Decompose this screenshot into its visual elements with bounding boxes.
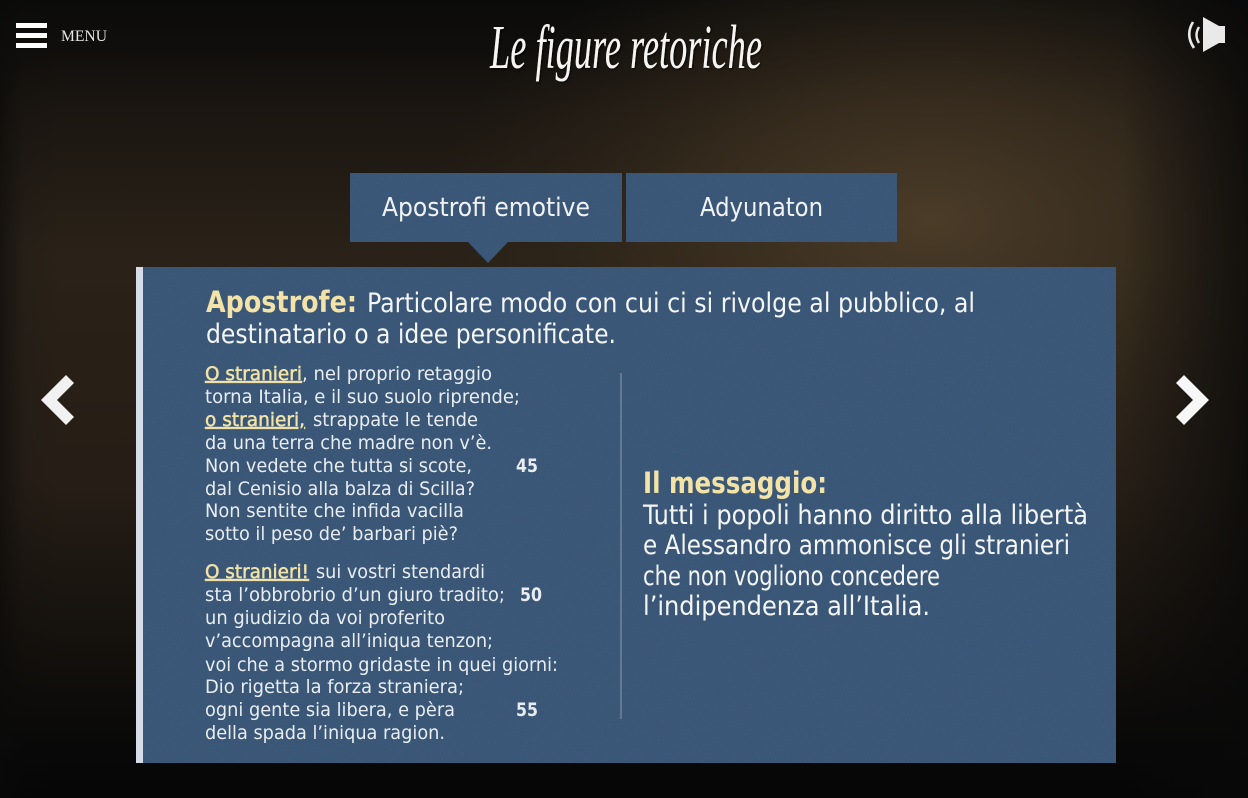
poem: second stanza: ogni gente sia libera, e pèra bbox=[205, 699, 455, 721]
poem: second stanza: un giudizio da voi proferito bbox=[205, 607, 445, 629]
poem: first stanza: Non sentite che infida vacilla bbox=[205, 500, 464, 522]
poem: second stanza: Dio rigetta la forza straniera; bbox=[205, 676, 464, 698]
poem: second stanza bbox=[205, 561, 558, 744]
poem: first stanza: strappate le tende bbox=[313, 409, 478, 431]
panel: content bbox=[136, 267, 1116, 763]
heading: Apostrofe definition bbox=[206, 285, 975, 350]
poem: second stanza: della spada l’iniqua ragion. bbox=[205, 722, 445, 744]
poem: first stanza: Non vedete che tutta si scote, bbox=[205, 455, 472, 477]
arrow: previous bbox=[41, 375, 74, 425]
poem: first stanza: sotto il peso de’ barbari piè? bbox=[205, 523, 458, 545]
message block: l’indipendenza all’Italia. bbox=[643, 591, 930, 622]
poem: first stanza: dal Cenisio alla balza di Scilla? bbox=[205, 478, 475, 500]
icon: speaker bbox=[1189, 17, 1225, 52]
line number 50: 50 bbox=[520, 584, 542, 606]
message block: e Alessandro ammonisce gli stranieri bbox=[643, 530, 1070, 561]
tab: Adyunaton: Adyunaton bbox=[700, 193, 823, 223]
poem: first stanza bbox=[205, 363, 520, 545]
line number 55: 55 bbox=[516, 699, 538, 721]
tab: Apostrofi emotive: Apostrofi emotive bbox=[382, 193, 590, 223]
icon: hamburger menu bbox=[16, 23, 47, 48]
message block: Tutti i popoli hanno diritto alla libertà bbox=[642, 500, 1088, 531]
poem: first stanza: o stranieri, bbox=[205, 409, 305, 431]
line number 45: 45 bbox=[516, 455, 538, 477]
message block: che non vogliono concedere bbox=[643, 561, 940, 592]
tab: Adyunaton bbox=[626, 173, 897, 242]
poem: first stanza: da una terra che madre non v’è. bbox=[205, 432, 492, 454]
panel left bar bbox=[136, 267, 143, 763]
tab: Apostrofi emotive bbox=[350, 173, 622, 263]
poem: first stanza: , nel proprio retaggio bbox=[302, 363, 492, 385]
message block bbox=[642, 466, 1088, 622]
arrow: next bbox=[1176, 375, 1209, 425]
heading: Apostrofe definition: Apostrofe: bbox=[206, 285, 357, 319]
heading: Apostrofe definition: destinatario o a idee personificate. bbox=[206, 319, 616, 350]
poem: second stanza: O stranieri! bbox=[205, 561, 309, 583]
poem: second stanza: v’accompagna all’iniqua tenzon; bbox=[205, 630, 493, 652]
poem: first stanza: torna Italia, e il suo suolo riprende; bbox=[205, 386, 520, 408]
poem: first stanza: O stranieri bbox=[205, 363, 302, 385]
heading: Apostrofe definition: Particolare modo con cui ci si rivolge al pubblico, al bbox=[367, 288, 975, 319]
title: Le figure retoriche bbox=[489, 14, 762, 82]
panel background bbox=[136, 267, 1116, 763]
poem: second stanza: sta l’obbrobrio d’un giuro tradito; bbox=[205, 584, 505, 606]
menu label: MENU bbox=[61, 28, 107, 45]
message block: Il messaggio: bbox=[643, 466, 827, 500]
poem: second stanza: sui vostri stendardi bbox=[316, 561, 485, 583]
poem: second stanza: voi che a stormo gridaste in quei giorni: bbox=[205, 654, 558, 676]
